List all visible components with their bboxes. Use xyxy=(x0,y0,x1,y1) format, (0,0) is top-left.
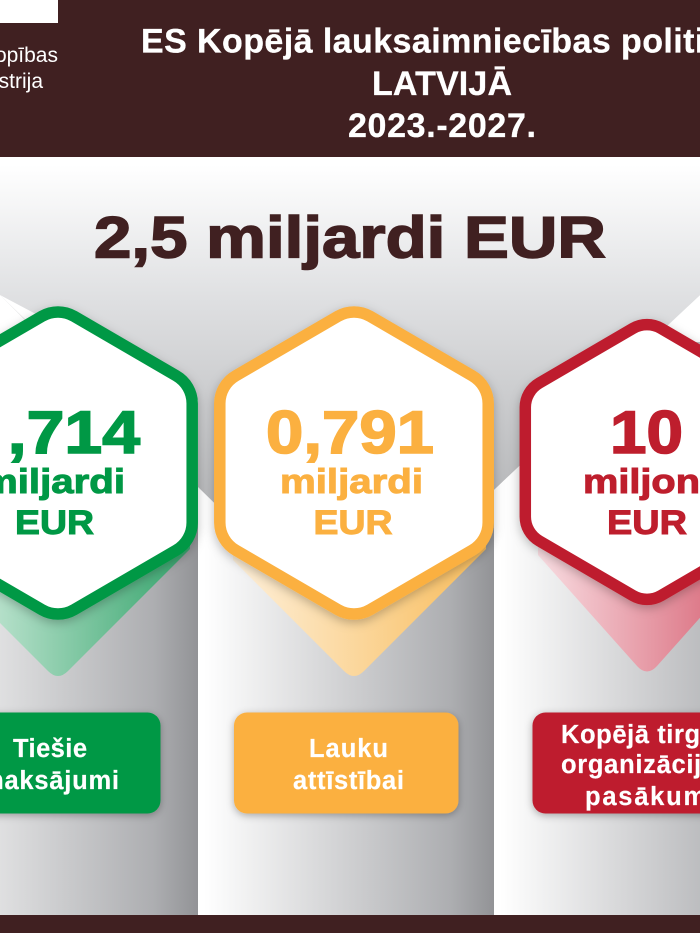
header band xyxy=(0,0,700,157)
amount: orange: 0,791 xyxy=(266,399,434,466)
panel: lauku attīstībai xyxy=(220,312,488,814)
amount: orange: EUR xyxy=(314,504,392,542)
logo text xyxy=(0,44,58,93)
amount: orange: miljardi xyxy=(280,463,423,501)
footer band xyxy=(0,915,700,933)
pointer: green xyxy=(0,500,190,676)
label: green xyxy=(0,712,160,814)
pointer: orange xyxy=(233,500,486,676)
logo white box xyxy=(0,0,58,23)
amount: red: EUR xyxy=(607,504,687,542)
hexagon: red xyxy=(525,325,700,599)
label text: red xyxy=(561,721,700,811)
hexagon: orange xyxy=(220,312,488,614)
header title: 2023.-2027. xyxy=(348,107,536,145)
amount: orange xyxy=(266,399,434,542)
header title: LATVIJĀ xyxy=(372,65,512,103)
amount: red: 10 xyxy=(610,399,683,466)
label text: orange xyxy=(293,735,404,795)
panel: tiešie maksājumi xyxy=(0,312,192,814)
headline total: 2,5 miljardi EUR xyxy=(94,206,606,270)
amount: red: miljoni xyxy=(583,463,700,501)
label text: orange: Lauku xyxy=(309,735,388,763)
pointer: red xyxy=(538,500,700,672)
header title xyxy=(141,22,700,145)
panel: kopējā tirgus organizācija xyxy=(525,325,700,814)
label text: green xyxy=(0,735,119,795)
amount: green xyxy=(0,410,141,535)
label: orange xyxy=(234,712,458,814)
label text: green: Tiešie xyxy=(13,735,87,763)
label: red xyxy=(532,712,700,814)
hexagon: green xyxy=(0,312,192,614)
label text: orange: attīstībai xyxy=(293,767,404,795)
amount: green: EUR xyxy=(15,504,94,542)
amount: red xyxy=(583,399,700,542)
